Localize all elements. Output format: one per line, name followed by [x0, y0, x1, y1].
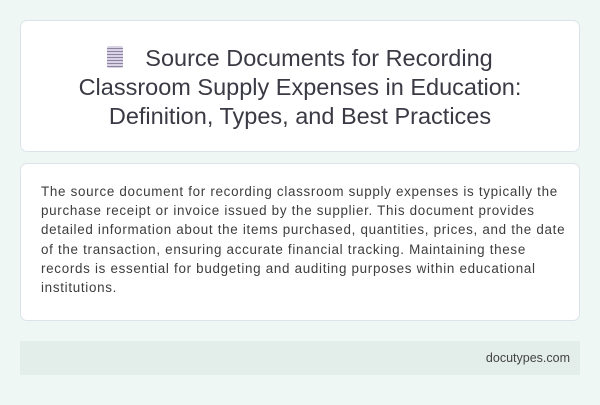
text block: description: detailed information about the items purchased, quantities, prices, and the date: [41, 222, 565, 237]
panel: title card: [20, 20, 580, 152]
icon: receipt: [107, 46, 123, 68]
text block: description: records is essential for budgeting and auditing purposes within educational: [41, 261, 536, 276]
text block: description: institutions.: [41, 280, 117, 295]
title: Source Documents for Recording Classroom Supply Expenses in Education: Definition, Types, and Best Practices: [79, 45, 521, 129]
text block: description: [41, 184, 565, 295]
footer: [20, 341, 580, 375]
text block: description: purchase receipt or invoice issued by the supplier. This document provides: [41, 203, 535, 218]
text block: description: of the transaction, ensuring accurate financial tracking. Maintaining these: [41, 242, 526, 257]
footer text: docutypes.com: [486, 351, 570, 365]
panel: description card: [20, 163, 580, 321]
text block: description: The source document for recording classroom supply expenses is typically the: [41, 184, 558, 199]
